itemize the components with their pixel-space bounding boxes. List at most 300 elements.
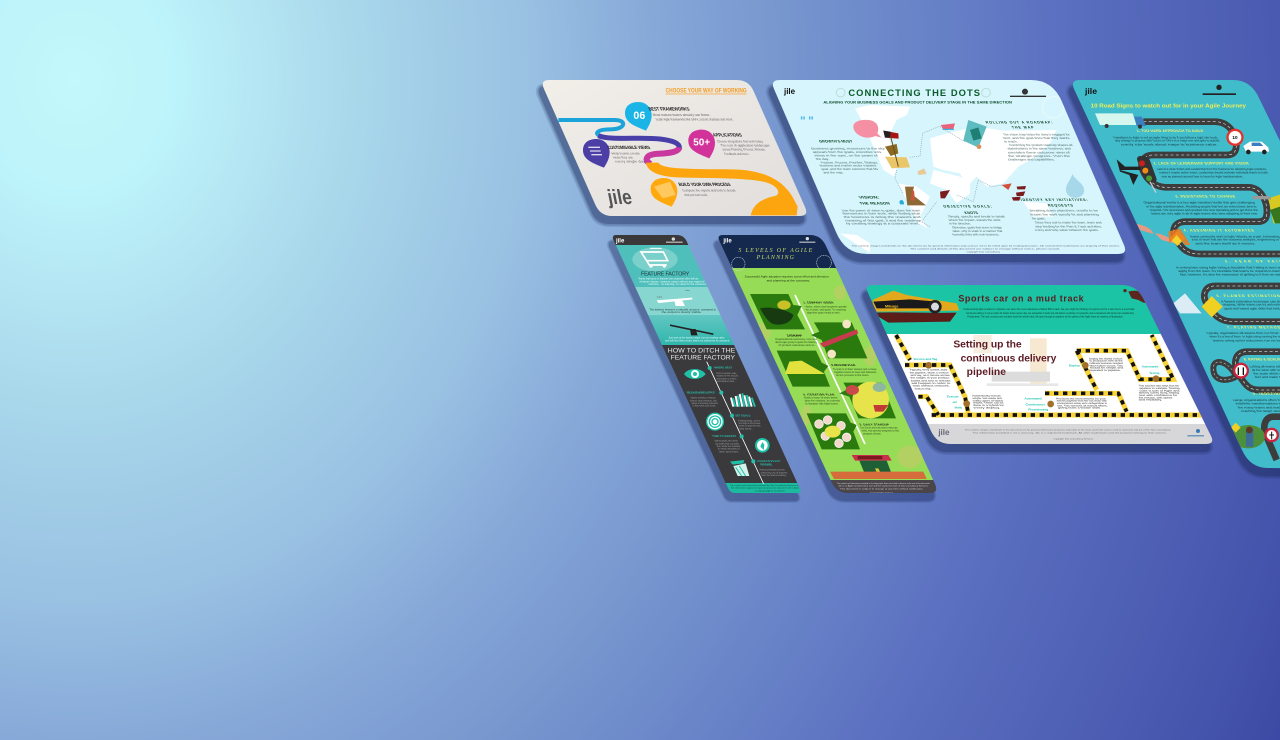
text: growth's must: the day. [815, 157, 830, 161]
dotted route [895, 126, 1003, 227]
heading: pipeline [967, 367, 1006, 378]
logo: jile: jile [937, 428, 950, 437]
text: best frameworks: Most mature teams already use these. [652, 113, 711, 117]
sign: winding [1233, 363, 1249, 379]
step labels: of product outcomes and so. [778, 343, 816, 347]
panel: feature factory [600, 230, 810, 500]
hazard tape pipeline [896, 335, 1205, 415]
section text: any change in process with Scrum or SAFe is a major one and gets to quickly [1114, 139, 1221, 143]
step descriptions: the pipeline, which a version [909, 371, 950, 374]
text: vision: Use the power of vision to guide, steer the team [841, 208, 921, 212]
text: growth's must [811, 140, 884, 174]
step descriptions: code is part of Agile and [1139, 389, 1181, 392]
text: objective goals: where the impact, sweats the work [948, 218, 1002, 222]
timeline labels and text: WHERE NEXT [713, 366, 733, 370]
footer text: the information appears for general purposes only and is the subject [731, 486, 800, 489]
step descriptions: rollback features needed [1089, 362, 1124, 365]
step descriptions: Deploy the tested version [1088, 357, 1124, 360]
icon: white seesaw: output [657, 295, 663, 298]
timeline [707, 362, 764, 484]
text: rolling out a roadmap: the strategic progress. Then the [1007, 154, 1071, 158]
cargo [917, 168, 927, 175]
pipeline labels: and [953, 400, 957, 404]
footer text: Copyright notice [870, 491, 895, 494]
step descriptions: builds and test to release [911, 379, 952, 382]
timeline labels and text: SET GOALS [734, 414, 751, 418]
text: growth's must: and the map. [823, 170, 844, 174]
footer text: Copyright Tata Consultancy [967, 250, 1000, 253]
icon: factory cart [632, 247, 678, 271]
pipeline labels: Notify [955, 405, 962, 409]
step descriptions: notify users of failed [972, 399, 1004, 402]
police car [1243, 142, 1269, 154]
step descriptions: will happen in order to [911, 382, 952, 385]
icon: white seesaw [657, 290, 692, 306]
lighthouse and rock [899, 187, 926, 205]
text: growth's must: goal, and the team outcome that fits [820, 167, 879, 171]
pin: 06 [625, 102, 652, 131]
text: rolling out a roadmap: provides them outcome view of [1007, 150, 1071, 154]
section text: Transitions to Agile is not an agile thing to do if you follow a rigid rule book, [1112, 135, 1219, 139]
step labels: 2. ROADMAP [786, 334, 803, 338]
footer text: The content, images and details in this document are for general information purposes and relate to the tools, and trade names used to represent and are of the Tata Consultancy [965, 428, 1172, 431]
step labels: 3. RELEASE PLAN [830, 363, 856, 367]
timeline labels and text: Sprint goals are done [714, 440, 739, 443]
step labels: 5. DAILY STANDUP [859, 422, 890, 426]
step descriptions: mark artefacts versioned, [912, 385, 951, 388]
text: best frameworks: BEST FRAMEWORKS [648, 107, 691, 113]
step descriptions: ready to ship. [914, 387, 932, 390]
logo: jile: jile [1084, 86, 1097, 96]
pipeline labels: Automated [1142, 365, 1159, 369]
mountain [1173, 293, 1202, 313]
section text: stopping. While teams can try and estimate [1222, 303, 1280, 307]
body: the output is clearly visible. [662, 311, 702, 314]
text: vision: VISION: [858, 195, 880, 199]
step descriptions: the stages of your product, [910, 377, 951, 380]
text: rolling out a roadmap: stakeholders in the same business, and [1007, 147, 1072, 151]
text: objective goals: Simply, specify and break in detail [947, 215, 1006, 219]
text: growth's must: Purpose, Process, Priorities, Strategy, [820, 160, 878, 164]
text: rolling out a roadmap: ROLLING OUT A ROADMAP: [985, 120, 1053, 124]
footer text: The content and details of this document are subject to change without notice, please consult. [910, 248, 1061, 251]
winding ribbon road [558, 120, 798, 215]
pipeline labels: Provisioning [1028, 408, 1049, 412]
text: customisable views: CUSTOMISABLE VIEWS [607, 145, 652, 151]
step descriptions: Provision the environments for your [1056, 397, 1107, 400]
body: and will find that a team that's not valued for its outcome. [665, 339, 730, 342]
company logo [1187, 429, 1204, 436]
section text: indefinite transformations where [1235, 402, 1280, 406]
heading: how to ditch: HOW TO DITCH THE [668, 347, 736, 354]
section text: makes it require active vision. Leadership should motivate individual teams to build [1158, 171, 1269, 175]
section text: good well based agile skills that hold back [1223, 306, 1280, 310]
small ship [941, 123, 955, 129]
text: customisable views: views they use [612, 155, 634, 159]
text: applications [713, 133, 770, 155]
intro [963, 308, 1135, 319]
step labels: allow Agile group to guide the delivery [774, 340, 818, 344]
step labels: held, not synced progress to the [861, 429, 900, 433]
footer text [852, 245, 1121, 253]
text: identify key initiatives: the goals. [1031, 216, 1046, 220]
text: identify key initiatives [1020, 198, 1108, 232]
pipeline labels: Testing [1149, 371, 1159, 375]
footer text: The information provided is not a warranty. Jile is a registered trademark. All other trademarks and the products belong to their owners. [973, 431, 1167, 434]
step labels: To plan in to their release and a close [832, 367, 878, 371]
step descriptions: giving team a known state. [1057, 407, 1102, 410]
step labels: on the process in the team. [835, 373, 870, 377]
text: objective goals: honestly links with real business. [952, 233, 1000, 237]
text: objective goals: value, only to scale in a manner that [951, 229, 1003, 233]
step descriptions: delivery pipeline from the tool chain with [1056, 400, 1108, 403]
text: applications: Feedback and more. [723, 152, 750, 156]
section text: reaching the target slowly. [1240, 409, 1280, 413]
heading: FEATURE FACTORY [641, 271, 690, 277]
timeline labels and text: and teams, to evolve [716, 377, 738, 380]
timeline labels and text: removing a lot of features [760, 471, 789, 474]
heading: continuous delivery [961, 353, 1057, 364]
section text: fast, however, it's also the expression of getting to it from an early stage. [1179, 272, 1280, 276]
timeline labels and text: and what. [738, 427, 753, 430]
heading: Setting up the [953, 340, 1022, 351]
timeline labels and text [686, 366, 790, 477]
section text: respond. The processes and product mix new operating and to get there the [1149, 208, 1259, 212]
body: a feature factory: measure output without any regard of [639, 280, 705, 283]
timeline labels and text: Reducing unneeded work and [759, 469, 786, 472]
text: identify key initiatives: known the work specify fix and planning [1029, 213, 1100, 217]
panel: sports car on a mud track [860, 280, 1220, 451]
step descriptions: pipeline to validate. Testing [1139, 387, 1181, 390]
footer text: Copyright notice [755, 489, 787, 492]
step descriptions: scripts, test suites and [972, 397, 1003, 400]
pipeline labels: Automated [1024, 397, 1042, 401]
step labels: Vision, vision and long-term growth [804, 304, 848, 308]
faded pipeline background [973, 335, 1058, 386]
text: vision: themselves in their work, while finding what [842, 212, 921, 216]
text: identify key initiatives: every and help value between the goals. [1034, 228, 1099, 232]
crowd [830, 472, 927, 479]
pin: 50+: 50+ [693, 137, 710, 148]
section text: new as planned around how to know for Agile transformation. [1161, 174, 1244, 178]
body: The balance between a valuable outcome, compared to [649, 308, 717, 311]
text: growth's must: Business growing, resources to the sky [810, 146, 886, 150]
body: Teams that focus on features over outcomes often fall into [638, 278, 699, 281]
step descriptions [905, 357, 1187, 410]
icon: stopwatch [755, 438, 770, 453]
title: Sports car on a mud track [958, 294, 1084, 304]
icon: target [707, 413, 723, 430]
timeline labels and text: and think in time. [716, 380, 736, 383]
icon: eye [684, 369, 706, 379]
text: growth's must: GROWTH'S MUST [818, 139, 854, 143]
intro text [745, 275, 829, 282]
timeline labels and text: RELEASE MORE OUTPUT [686, 391, 716, 395]
company logo [1010, 89, 1046, 97]
quote marks: " " [800, 114, 814, 128]
step labels: align their goals clearly to work. [806, 310, 841, 314]
step labels: for, to plan, and goals. To roadmap [805, 307, 847, 311]
text: identify key initiatives: REQUESTS [1047, 204, 1074, 208]
intro text: and planning at the company. [767, 278, 810, 282]
panel: connecting the dots [765, 70, 1135, 261]
heading [953, 340, 1057, 378]
title: CONNECTING THE DOTS [848, 88, 980, 98]
infographic collage [536, 80, 1280, 503]
text: applications: across Planning, Process, Release, [722, 148, 767, 152]
timeline labels and text: Sprint activity to extract [690, 397, 717, 400]
timeline labels and text: TIME TO MARKET [711, 434, 737, 438]
timeline labels and text: from the team's backlog. [761, 474, 787, 477]
icon: trash [730, 460, 749, 476]
text: growth's must: business and market sector explains [819, 164, 878, 168]
section text: overly rule book about maps to business value. [1120, 142, 1219, 146]
pin: 06: 06 [633, 110, 645, 122]
section text [1109, 129, 1280, 413]
heading: how to ditch [668, 347, 736, 361]
icon: dark seesaw [670, 324, 713, 335]
timeline labels and text: find target in the process [738, 422, 762, 425]
title: 5 LEVELS OF AGILE [738, 248, 813, 254]
logo: jile: jile [783, 87, 796, 96]
title: 10 Road Signs to watch out for in your Agile Journey [1091, 103, 1247, 109]
text: objective goals: Otherwise, goals that seem to bridge [951, 225, 1003, 229]
body: outcome - no learning, no value for the customer. [648, 283, 707, 286]
step labels: 1. COMPANY VISION [802, 301, 834, 305]
timeline labels and text: to fine-tune your work. [692, 405, 717, 408]
step labels: plan for release, to commit [804, 399, 841, 403]
section text: 2. LACK OF LEADERSHIP SUPPORT AND VISION [1153, 162, 1250, 166]
subtitle: ALIGNING YOUR BUSINESS GOALS AND PRODUCT DELIVERY STAGE IN THE SAME DIRECTION [823, 100, 1012, 105]
pipeline labels: Continuous [1025, 403, 1046, 407]
company logo [666, 237, 683, 243]
water drop [1066, 174, 1084, 198]
pipeline labels: Execute [947, 394, 959, 398]
section text: teams are very agile in all of agile teams who were adapting to their new. [1150, 212, 1259, 216]
text: vision: by creating strategy at a corporate level. [845, 222, 920, 226]
step labels: progress of team. [862, 432, 882, 436]
pin: 50+ [688, 130, 715, 158]
panel: choose your way of working [536, 80, 807, 227]
speed sign: 10 [1232, 135, 1238, 140]
step descriptions: repeated in pipeline. [1089, 369, 1122, 372]
title: CHOOSE YOUR WAY OF WORKING [666, 88, 747, 95]
heading: how to ditch: FEATURE FACTORY [671, 354, 735, 361]
text: customisable views [608, 146, 650, 164]
step descriptions: results. These can be [972, 402, 1005, 405]
text: objective goals [943, 205, 1005, 236]
section text: Organizational inertia is a key agile transition hurdle that gets challenging [1143, 200, 1256, 204]
body [649, 308, 717, 314]
timeline labels and text: leaders for the choices [716, 375, 740, 378]
text: best frameworks [648, 107, 734, 121]
text: applications: APPLICATIONS [712, 133, 744, 139]
section text: Last of a clear Vision and Leadership from the business for adopting Agile practices [1156, 167, 1267, 171]
flag and raft [883, 131, 910, 168]
mud splash [1123, 289, 1153, 304]
text: rolling out a roadmap: The vision map helps the story's engaged for [1002, 133, 1070, 137]
footer text: The content and information provided in this infographic does not include reference to the use of this document. [837, 482, 930, 485]
text: build your own process: Compose the reports and tools to decide [682, 189, 737, 193]
step labels: Organisational outcomes, core and [774, 337, 818, 341]
text: best frameworks: Scale Agile frameworks like SAFe, Scrum, Kanban and more. [655, 117, 734, 121]
racing car: Mileage [885, 305, 898, 309]
text: build your own process: what your team needs. [683, 193, 708, 197]
text: applications: The rest of application landscape [720, 144, 771, 148]
text: vision: the business is doing the reasons and [843, 215, 922, 219]
text: identify key initiatives: Breaking down objectives, results to be [1029, 209, 1099, 213]
step descriptions: Test activities take steps from the [1138, 385, 1180, 388]
truck [1095, 113, 1146, 129]
logo: jile: jile [722, 239, 732, 245]
footer text [730, 484, 800, 492]
company logo [1203, 85, 1236, 95]
text: rolling out a roadmap: Combining the product roadmap shapes all [1008, 143, 1074, 147]
pipeline labels: Deploy [1069, 363, 1080, 367]
photo: hiker [1231, 423, 1265, 448]
text: customisable views: every single day. [614, 159, 647, 163]
step labels: Build a base of work items [803, 396, 839, 400]
pipeline labels: Version and Tag [913, 357, 938, 361]
step descriptions: when failure occurs. This [1089, 364, 1124, 367]
step descriptions: the release, with speed [1138, 396, 1174, 399]
section text: 1. TOO HARD APPROACH TO AGILE [1136, 129, 1205, 133]
section text: A flawed estimation technique can drive [1220, 299, 1280, 303]
step descriptions: line. This removes all manual efforts, [1057, 404, 1109, 407]
footer text [837, 482, 930, 494]
section text: and the team itself as it moves. [1194, 241, 1256, 245]
intro: Continuous delivery is not an option for feature driven teams; they use automation to build, test and deliver everything. It is powerful, and a comparison with sports cars explains why. [966, 312, 1135, 315]
timeline line [795, 295, 865, 444]
sign: rock [1202, 296, 1223, 317]
step descriptions: done in a hybrid for [973, 404, 1005, 407]
speech bubble [853, 120, 882, 138]
text: vision: THE REASON [859, 201, 891, 205]
block: iteration plan [839, 382, 896, 418]
green scene [1252, 193, 1280, 223]
footer text: Jile is an Agile transformation tool and the registered mark of Tata Consultancy Services. [838, 485, 929, 488]
step labels: 4. ITERATION PLAN [802, 392, 835, 396]
step descriptions: to production with all the [1089, 360, 1124, 363]
section text: 6. FLAWED ESTIMATION [1216, 294, 1280, 298]
section text: the many teams and leaders do [1237, 405, 1280, 409]
logo: jile: jile [605, 186, 634, 209]
step descriptions: Automatically execute [972, 395, 1002, 398]
body [665, 336, 730, 342]
step descriptions: every deploy. [973, 406, 1001, 409]
text: objective goals: in the direction. [948, 221, 972, 225]
traffic light and crossing [1117, 156, 1158, 193]
footer text [965, 428, 1172, 440]
section text: agility from the team. It's inevitable that teams be required to learn from failure [1178, 269, 1280, 273]
compass icons [836, 88, 1064, 118]
step descriptions: should be simple and [1089, 367, 1125, 370]
step descriptions: delivery comes along, helping [1138, 392, 1180, 395]
text: identify key initiatives: step feeding for the Plan & Track activities, [1034, 224, 1103, 228]
timeline labels and text: adopt a learning outcome [691, 402, 719, 405]
text: customisable views: Help teams create [611, 151, 641, 155]
racing car [872, 291, 959, 323]
intro text: Successful Agile adoption requires some effort and direction [745, 275, 829, 279]
title [738, 248, 813, 261]
market stall [852, 455, 893, 478]
map picture [963, 120, 987, 149]
title: PLANNING [756, 255, 795, 261]
cog icons [925, 362, 1159, 407]
text: rolling out a roadmap: THE MAP [1011, 125, 1035, 129]
body [638, 278, 707, 286]
text: objective goals: KNOTS [964, 211, 979, 215]
faint decor blobs [756, 285, 923, 468]
compass decoration [732, 255, 831, 271]
timeline labels and text: feature value measure, and [690, 399, 718, 402]
step descriptions: and reliability. [1138, 399, 1163, 402]
timeline labels and text: Finding things, and to [738, 419, 761, 422]
block: release plan [777, 351, 830, 387]
company logo [799, 237, 815, 243]
section text: 3. RESISTANCE TO CHANGE [1174, 194, 1237, 198]
world map [840, 105, 1057, 253]
pin: orange [651, 178, 677, 207]
timeline labels and text: time and learn. [719, 450, 740, 453]
timeline labels and text: Plan for outcome, make [716, 372, 738, 375]
section text: in the agile transformation. Resisting people that feel an entrenched view to [1145, 204, 1257, 208]
panel: 10 road signs [1065, 70, 1280, 480]
step labels [771, 301, 902, 436]
intro: Implementing Agile practices in pipeline can seem the most natural as a Maruti 800 a track, but you might be thinking of a sports car for a race but in a mud track. [963, 308, 1135, 311]
text: rolling out a roadmap: challenges and capabilities. [1007, 158, 1056, 162]
timeline labels and text: by teams that can push [715, 442, 740, 445]
speed sign [1226, 129, 1244, 146]
section text: teams using sprint outcomes run no longer feel. [1212, 338, 1280, 342]
timeline labels and text: UNNECESSARY [756, 459, 782, 463]
step labels: Run Scrum and each team's daily sync [860, 426, 899, 430]
text: vision: meaning of this goal, it and the roadmap [844, 218, 922, 222]
icon: bars [731, 393, 755, 407]
text: rolling out a roadmap [985, 121, 1073, 162]
text: growth's must: appears from the goals, executive lens [812, 150, 883, 154]
logo: jile: jile [615, 239, 625, 245]
step descriptions: and tag, as it moves across [910, 374, 951, 377]
timeline labels and text: the work for market [716, 445, 741, 448]
footer text: This document is subject to change at any time without notification. [840, 487, 924, 490]
text: build your own process: BUILD YOUR OWN PROCESS [678, 182, 732, 188]
intro: Productivity. The tool, process and mindset work the whole track Jile gets through its pipeline at the speed of the Agile team at mastery of Application. [967, 316, 1124, 319]
footer text: The content and information provided by Tata Consultancy Services and [730, 484, 800, 487]
road [1142, 122, 1280, 460]
sign: pedestrian [1264, 428, 1279, 442]
text: objective goals: OBJECTIVE GOALS: [943, 205, 993, 209]
red ships [940, 183, 1026, 201]
text: rolling out a roadmap: next, and the goal lines that they wants [1002, 136, 1071, 140]
text: growth's must: views in the sync, on the power of [813, 153, 879, 157]
text: identify key initiatives: IDENTIFY KEY INITIATIVES: [1020, 198, 1088, 202]
step descriptions: environment setup and configuration in [1057, 402, 1109, 405]
icon: white seesaw: value [685, 290, 691, 292]
timeline labels and text: based on goals the work [738, 425, 762, 428]
pipeline labels [913, 357, 1159, 412]
step labels: together teams to have and delivered [833, 370, 877, 374]
timeline labels and text: in small amounts of [717, 448, 741, 451]
panel: 5 levels of agile planning [710, 230, 945, 500]
text: identify key initiatives: Since they suit to make the team, learn and [1034, 221, 1103, 225]
text: applications: Choose integrations that work today. [716, 139, 764, 143]
pin: checklist [583, 139, 610, 168]
timeline labels and text: FEATURES [760, 462, 773, 466]
lobster and warning sign [1137, 224, 1191, 246]
section text: Large organizations often have [1232, 398, 1280, 402]
block: roadmap [811, 320, 867, 358]
